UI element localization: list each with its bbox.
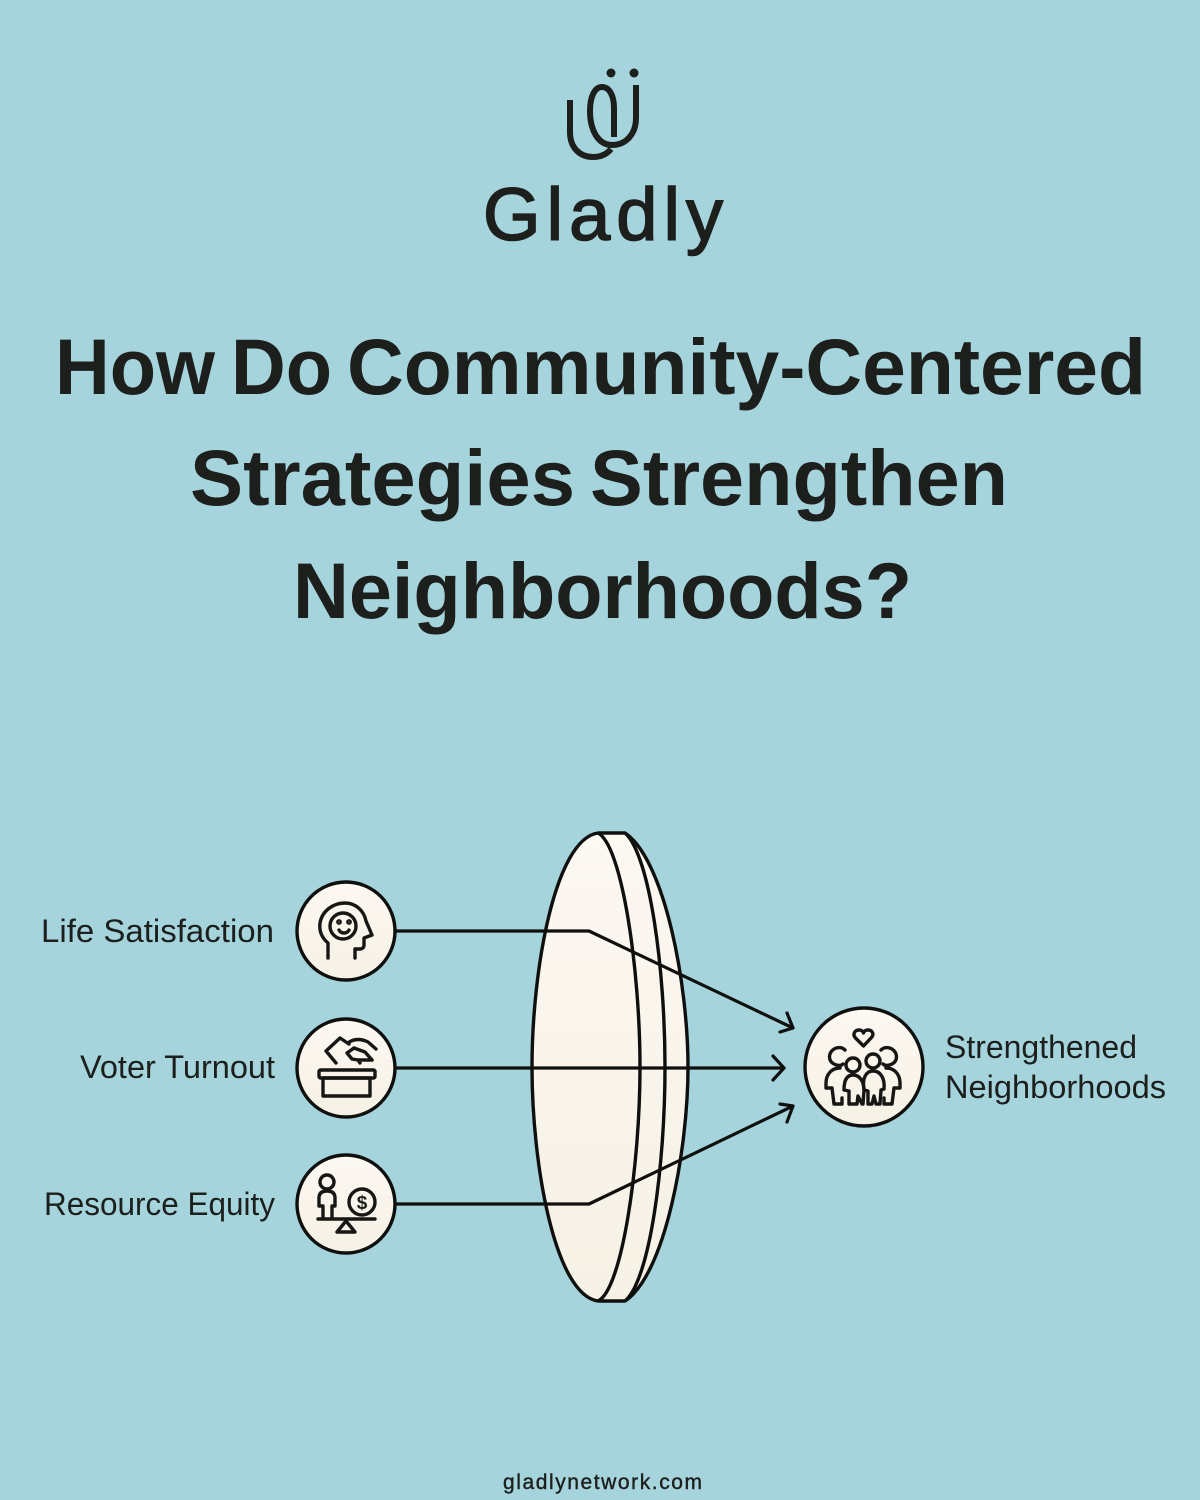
title: How: [55, 322, 216, 411]
title: Strengthen: [590, 433, 1008, 522]
label: life satisfaction: Life Satisfaction: [41, 913, 274, 949]
title: Strategies: [190, 433, 575, 522]
label: strengthened neighborhoods: Strengthened: [945, 1029, 1137, 1065]
icon: paperclip logo mark: [570, 68, 638, 157]
icon: head with smile: [297, 882, 395, 980]
logo: [483, 68, 723, 256]
logo wordmark: Gladly: [483, 173, 723, 256]
label: strengthened neighborhoods: Neighborhoods: [945, 1069, 1166, 1105]
arrow: life satisfaction to outcome: [396, 931, 793, 1032]
title: Community-Centered: [347, 322, 1146, 411]
icon: person and coin on a balance: [297, 1155, 395, 1253]
footer url: gladlynetwork.com: [503, 1471, 702, 1494]
label: strengthened neighborhoods: [945, 1029, 1166, 1105]
title: Do: [231, 322, 332, 411]
arrow: voter turnout to outcome: [396, 1056, 784, 1080]
label: resource equity: Resource Equity: [44, 1186, 275, 1222]
icon: ballot box: [297, 1019, 395, 1117]
title: [55, 322, 1146, 635]
dollar sign: $: [357, 1193, 368, 1214]
title: Neighborhoods?: [293, 546, 912, 635]
outcome icon: family with heart: [805, 1008, 923, 1126]
label: voter turnout: Voter Turnout: [80, 1049, 275, 1085]
arrow: resource equity to outcome: [396, 1104, 793, 1204]
lens diagram: [532, 833, 688, 1301]
